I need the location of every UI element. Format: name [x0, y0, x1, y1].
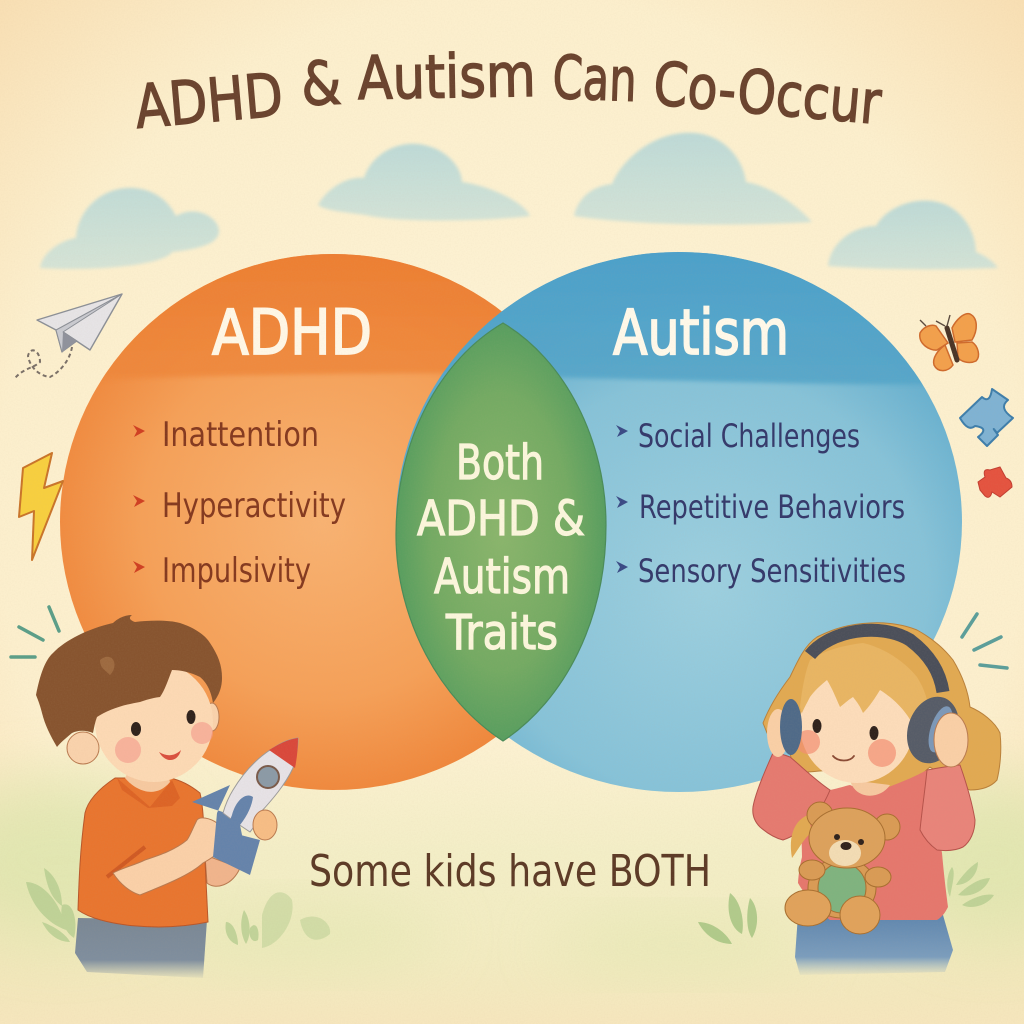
- title: Autism: [357, 41, 536, 114]
- plants: [26, 862, 994, 948]
- overlap text: Both: [456, 435, 544, 491]
- list: Autism traits: Sensory Sensitivities: [638, 552, 906, 590]
- icon: paper plane: [15, 294, 122, 378]
- list: ADHD traits: [133, 415, 346, 591]
- list: Autism traits: Repetitive Behaviors: [639, 488, 905, 526]
- head: [95, 662, 213, 782]
- title: ADHD: [132, 60, 286, 143]
- overlap text: Autism: [434, 549, 570, 605]
- cloud center right: [574, 133, 812, 224]
- title: &: [300, 49, 342, 120]
- icon: butterfly: [920, 314, 979, 371]
- neck: [850, 780, 890, 796]
- heading ADHD: ADHD: [212, 296, 372, 369]
- icon: blue puzzle piece: [960, 389, 1013, 446]
- venn diagram: [40, 240, 970, 792]
- cloud center left: [318, 144, 530, 220]
- bullets: [616, 425, 628, 573]
- clouds: [40, 133, 998, 269]
- motion marks right: [962, 614, 1007, 668]
- icon: lightning bolt: [19, 453, 63, 560]
- heading Autism: Autism: [613, 296, 789, 369]
- collar: [117, 778, 180, 808]
- motion marks left: [11, 607, 59, 657]
- far arm: [205, 855, 240, 886]
- boy with rocket: [36, 615, 298, 978]
- list: Autism traits: Social Challenges: [638, 417, 860, 455]
- list: ADHD traits: Hyperactivity: [162, 486, 346, 526]
- arm: [113, 818, 223, 895]
- shirt: [78, 778, 208, 927]
- overlap text: Traits: [445, 605, 558, 661]
- list: Autism traits: [616, 417, 906, 590]
- face details: [131, 722, 141, 736]
- right hand: [934, 713, 968, 767]
- ground wash: [0, 740, 1024, 1024]
- list: ADHD traits: Inattention: [162, 415, 319, 455]
- cloud far right: [828, 201, 998, 269]
- circle: Autism: [396, 240, 970, 792]
- left hand: [767, 709, 789, 757]
- title: [132, 41, 884, 143]
- ponytail tuft: [791, 815, 812, 858]
- right earcup: [899, 690, 967, 770]
- rocket: [192, 738, 298, 875]
- overlap text: [417, 435, 585, 661]
- jeans: [795, 915, 953, 975]
- girl with headphones and teddy: [753, 623, 1001, 975]
- caption: Some kids have BOTH: [309, 846, 711, 897]
- bullets: [133, 425, 145, 573]
- arm right: [920, 765, 975, 851]
- face: [800, 667, 914, 783]
- arm left: [753, 753, 830, 840]
- ears: [67, 732, 99, 764]
- headband: [810, 630, 943, 692]
- left earcup: [780, 699, 802, 755]
- title: Co-Occur: [651, 49, 884, 139]
- overlap: Both: [396, 323, 606, 741]
- neck: [125, 772, 170, 792]
- shirt: [798, 770, 948, 920]
- circle: ADHD: [60, 254, 502, 790]
- sleeve cuff: [107, 847, 145, 877]
- icon: red puzzle piece: [978, 467, 1012, 497]
- cloud far left: [40, 188, 219, 269]
- trousers: [75, 918, 207, 978]
- overlap text: ADHD &: [417, 491, 585, 547]
- teddy: [785, 802, 900, 934]
- title: Can: [551, 43, 638, 116]
- hair: [36, 615, 222, 747]
- list: ADHD traits: Impulsivity: [162, 551, 311, 591]
- hair back: [763, 623, 1001, 797]
- fringe: [800, 643, 927, 723]
- hair highlight: [100, 657, 115, 675]
